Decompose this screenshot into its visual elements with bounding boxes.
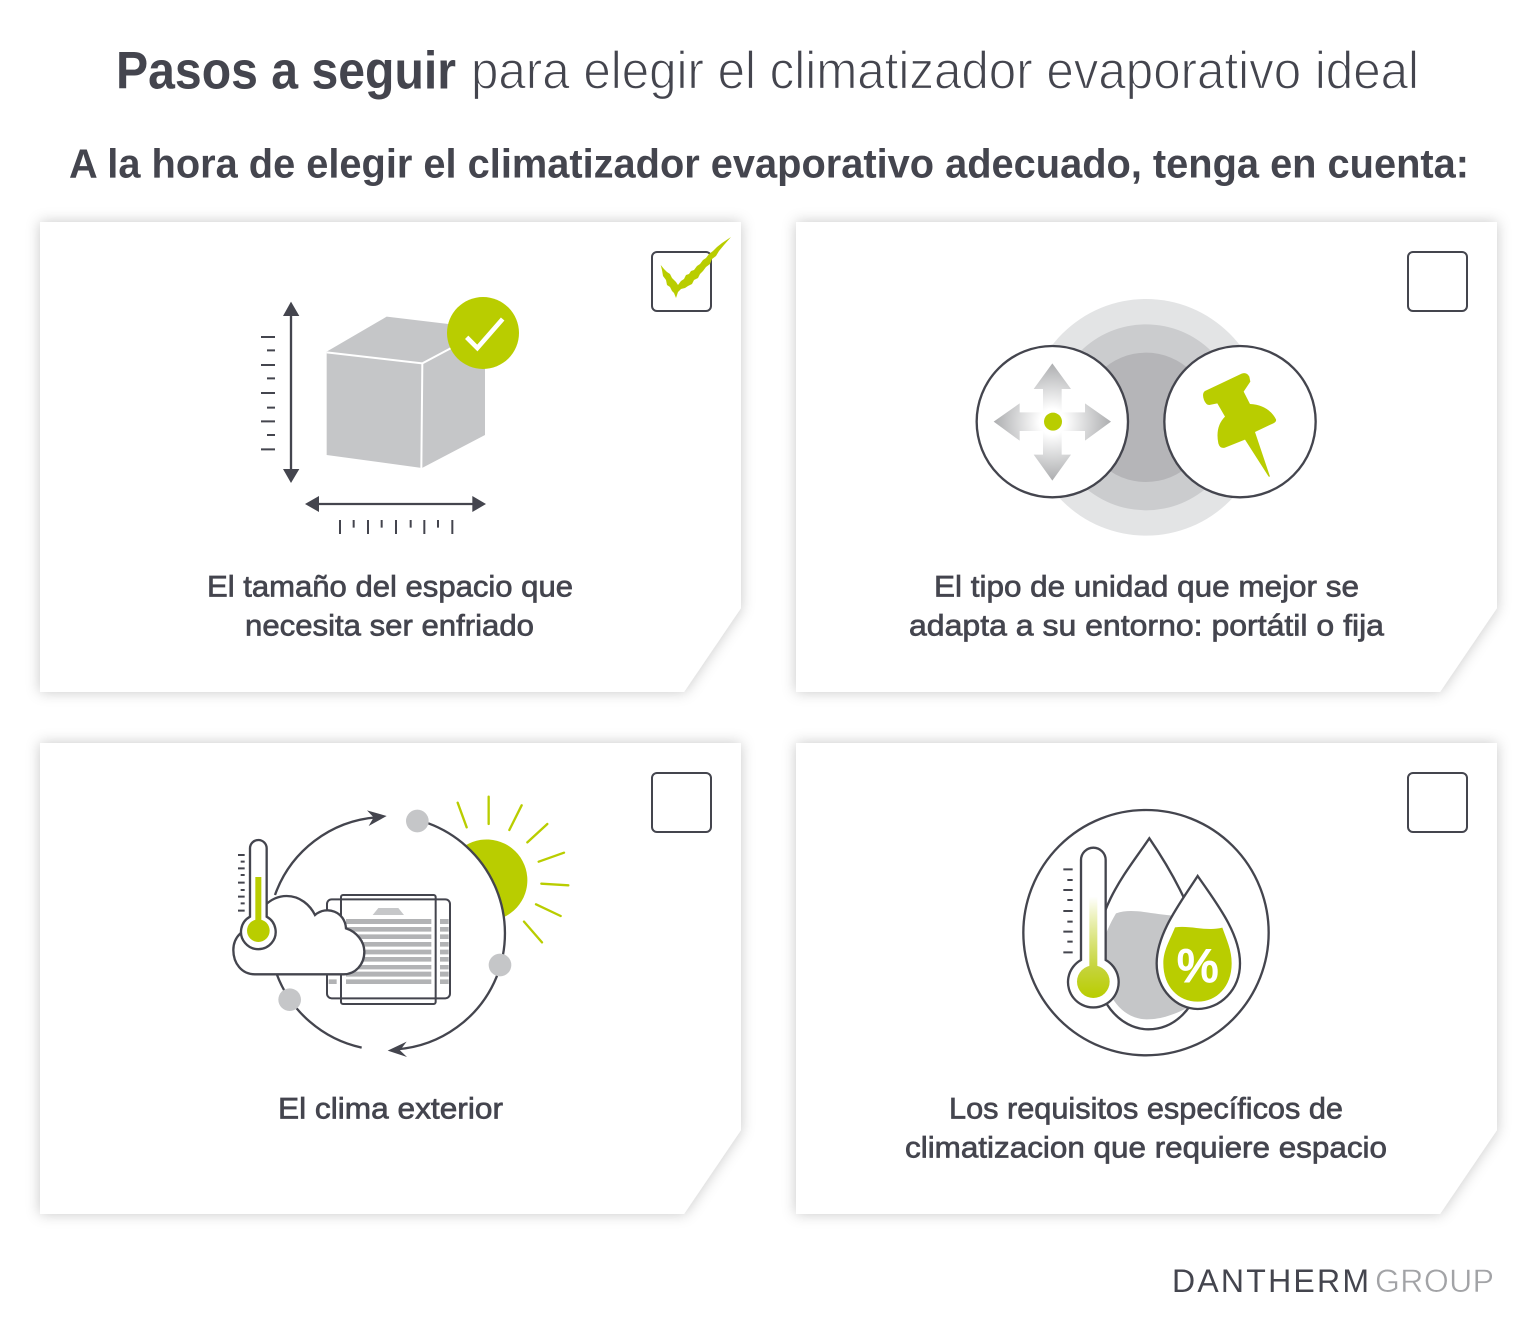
vertical dimension arrow xyxy=(261,302,299,483)
panel: tamaño del espacio xyxy=(40,222,741,692)
fixed circle with pin xyxy=(1164,346,1316,497)
checkbox xyxy=(1408,252,1467,311)
cycle arrows xyxy=(275,810,511,1057)
card text 2: El tipo de unidad que mejor se xyxy=(934,570,1359,604)
card text 3: El clima exterior xyxy=(278,1092,503,1126)
title: Pasos a seguir xyxy=(116,42,456,100)
checkbox xyxy=(652,773,711,832)
climate unit xyxy=(327,895,450,1004)
card text 1 xyxy=(207,570,573,642)
cube xyxy=(327,317,485,468)
card background 3 xyxy=(40,743,741,1214)
checkbox checked xyxy=(652,237,731,311)
thermometer xyxy=(1063,848,1119,1007)
logo: DANTHERM xyxy=(1172,1263,1369,1299)
icon: climate cycle xyxy=(233,797,568,1057)
card text 1: El tamaño del espacio que xyxy=(207,570,573,604)
icon: temperature and humidity xyxy=(1023,810,1269,1055)
icon: cube with dimensions xyxy=(261,297,519,534)
card text 1: necesita ser enfriado xyxy=(245,610,534,642)
horizontal dimension arrow xyxy=(305,496,486,534)
thermometer xyxy=(238,840,276,949)
title: para elegir el climatizador evaporativo ideal xyxy=(471,42,1419,100)
card text 2 xyxy=(909,570,1384,642)
sun xyxy=(458,797,568,942)
card background 2 xyxy=(796,222,1497,692)
card text 4: Los requisitos específicos de xyxy=(949,1092,1343,1126)
subtitle: A la hora de elegir el climatizador evaporativo adecuado, tenga en cuenta: xyxy=(69,140,1469,186)
portable circle with arrows xyxy=(977,346,1128,497)
large drop xyxy=(1095,838,1204,1029)
small drop with percent: % xyxy=(1177,940,1218,992)
green check badge xyxy=(447,297,519,369)
small drop with percent xyxy=(1157,876,1240,1009)
panel: requisitos de climatización xyxy=(796,743,1497,1214)
icon: portable or fixed xyxy=(977,299,1316,536)
cloud xyxy=(233,896,364,974)
card text 2: adapta a su entorno: portátil o fija xyxy=(909,610,1384,642)
panel: clima exterior xyxy=(40,743,741,1214)
card text 4: climatizacion que requiere espacio xyxy=(905,1132,1387,1164)
card background 1 xyxy=(40,222,741,692)
card text 4 xyxy=(905,1092,1387,1164)
concentric circles xyxy=(1028,299,1264,536)
logo xyxy=(1172,1263,1494,1299)
title xyxy=(116,42,1419,100)
panel: tipo de unidad xyxy=(796,222,1497,692)
card background 4 xyxy=(796,743,1497,1214)
logo: GROUP xyxy=(1375,1263,1494,1299)
checkbox xyxy=(1408,773,1467,832)
